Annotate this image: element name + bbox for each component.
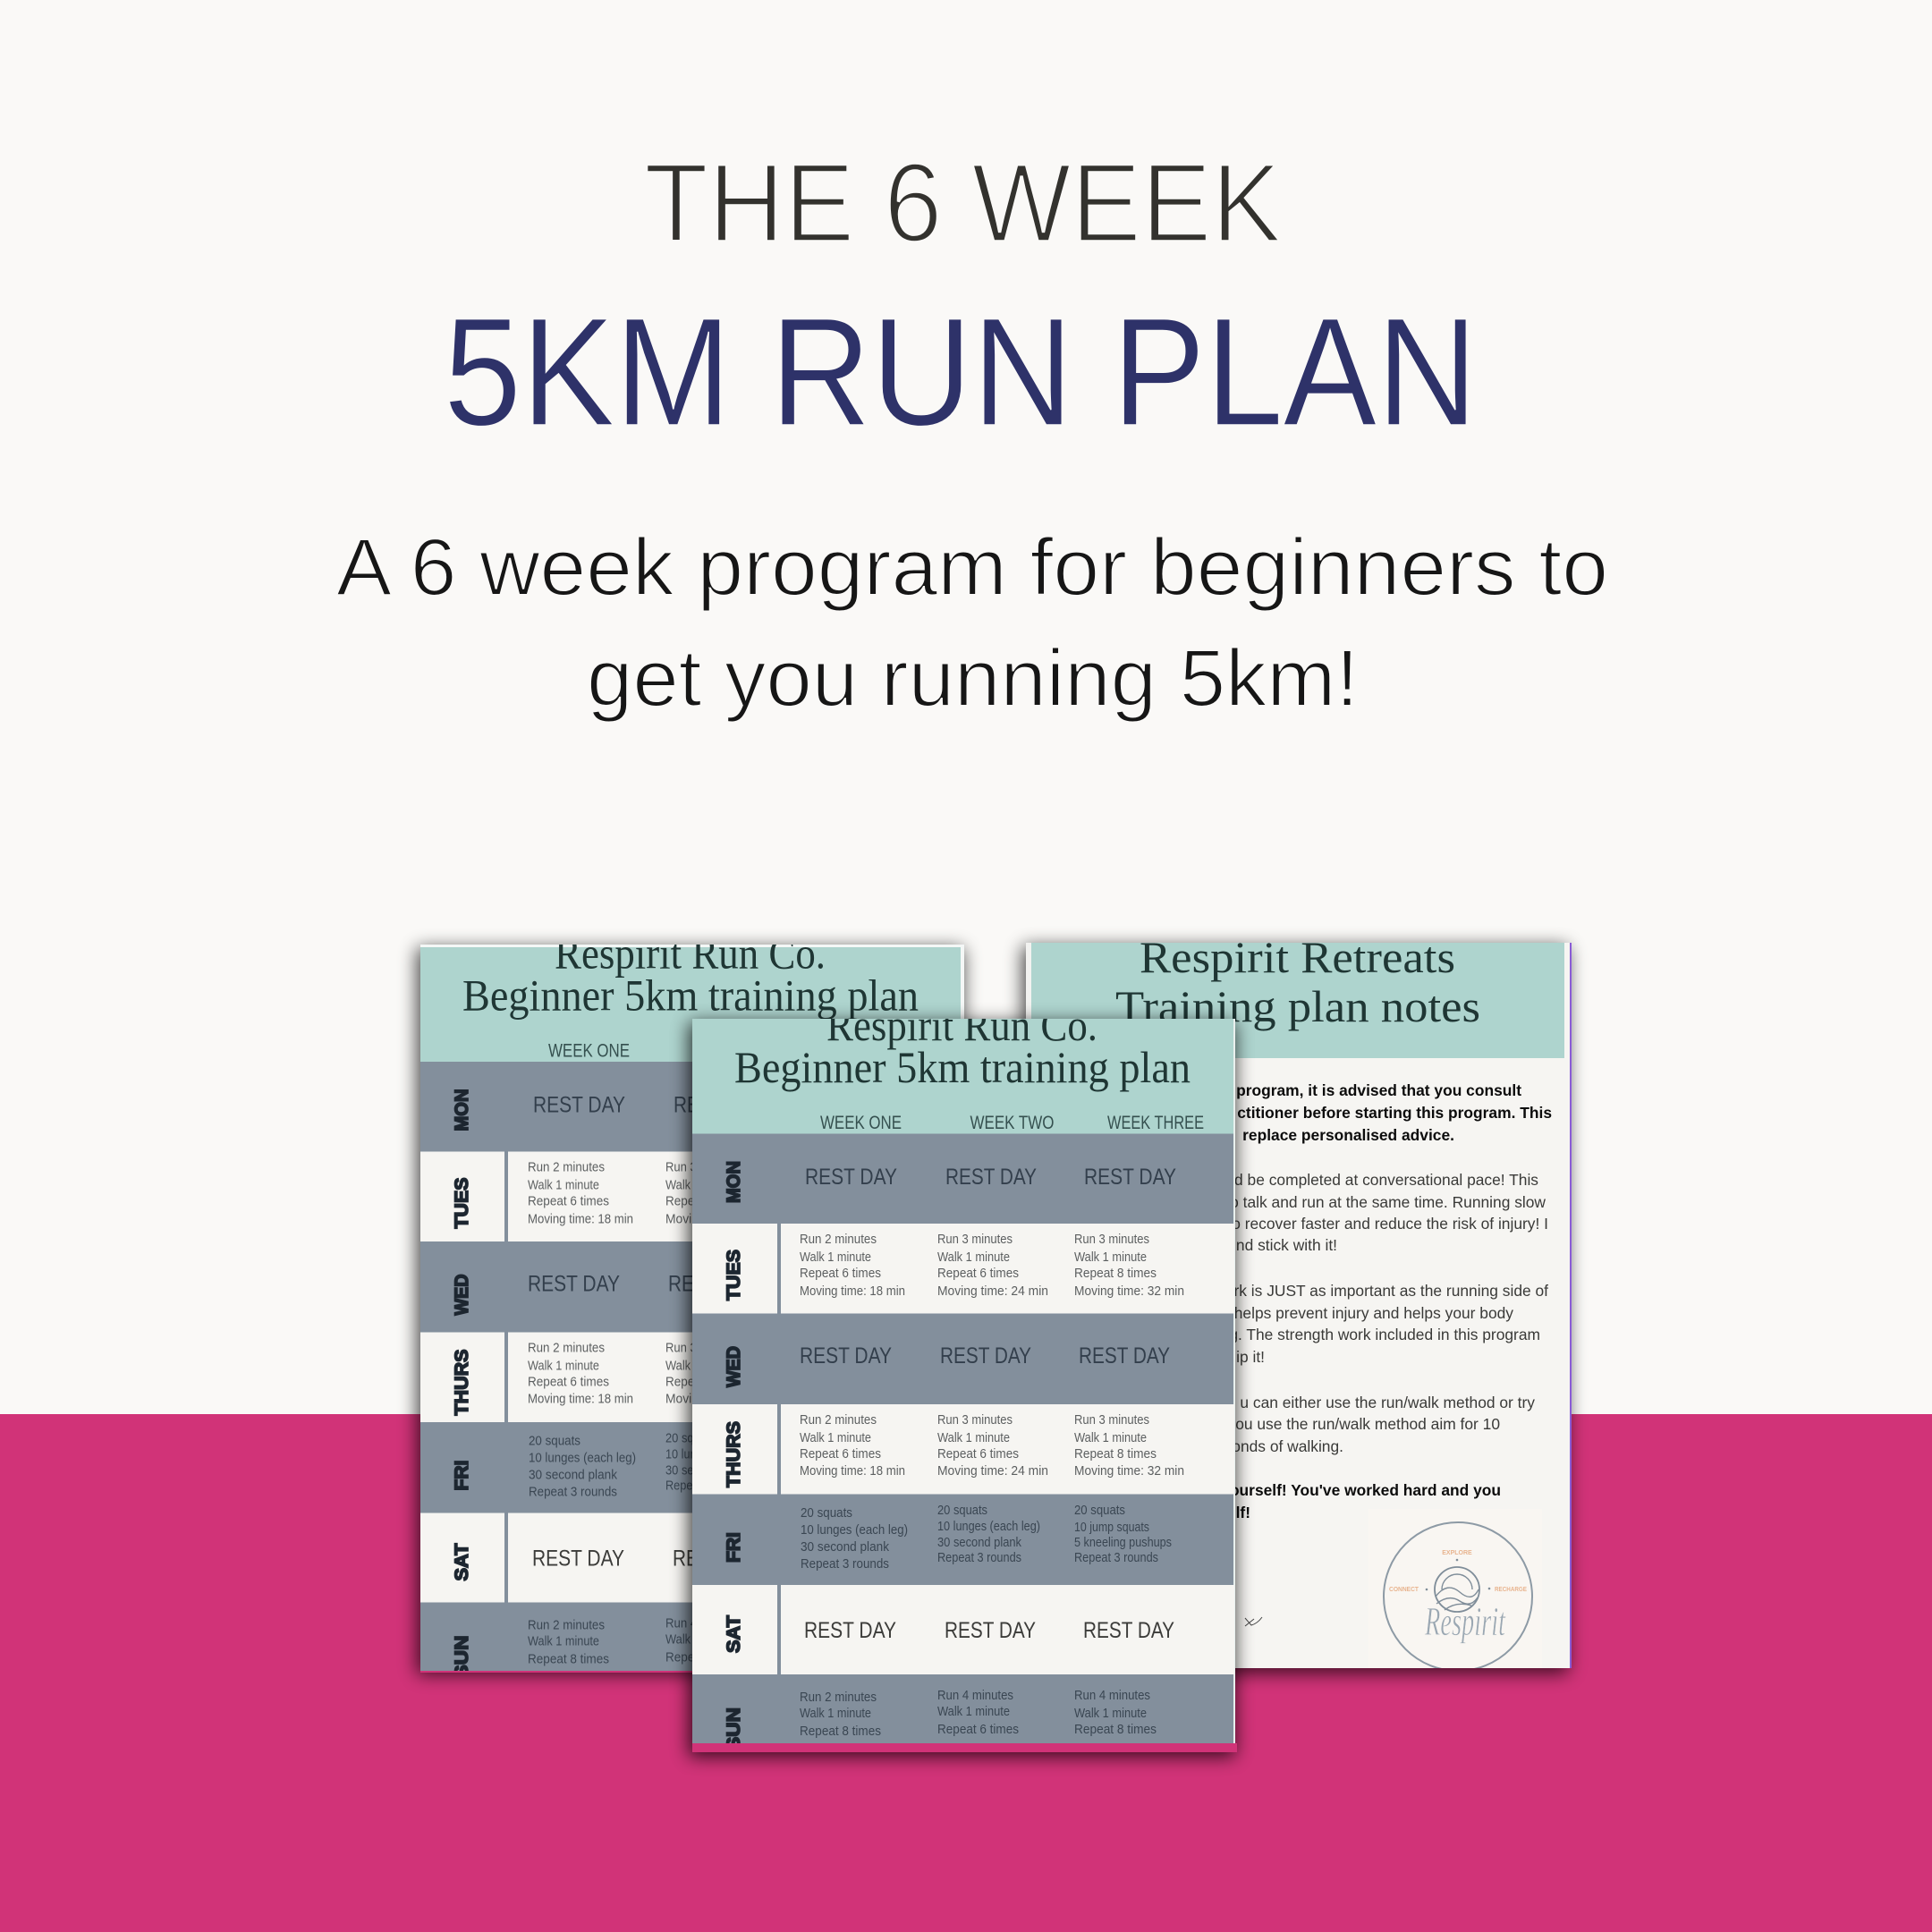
sunday sessions: Walk 1 minute: [1074, 1707, 1147, 1721]
back page schedule table: Run 4 minutes: [665, 1617, 741, 1631]
panel: back training plan page: [417, 928, 964, 1678]
notes body text: helps prevent injury and helps your body: [1234, 1304, 1513, 1322]
panel: front training plan page: [689, 1000, 1237, 1757]
thursday sessions: Run 3 minutes: [1074, 1413, 1149, 1428]
notes body text: [1225, 1081, 1552, 1521]
notes body text: o talk and run at the same time. Running slow: [1230, 1193, 1546, 1211]
back page schedule table: SUN: [452, 1635, 472, 1678]
back page schedule table: REST DAY: [673, 1546, 764, 1571]
back page schedule table: Run 2 minutes: [528, 1619, 605, 1633]
back page schedule table: Walk 1 minute: [665, 1179, 738, 1193]
tuesday sessions: Moving time: 18 min: [800, 1284, 905, 1299]
thursday sessions: Run 3 minutes: [937, 1413, 1013, 1428]
monday rest days: REST DAY: [1084, 1165, 1176, 1190]
friday strength sessions: 20 squats: [937, 1504, 987, 1518]
back page schedule table: Repeat 6 times: [665, 1195, 747, 1209]
day labels: WED: [724, 1346, 744, 1387]
tuesday sessions: Repeat 8 times: [1074, 1267, 1157, 1281]
back page schedule table: WED: [452, 1274, 472, 1315]
back page schedule table: 30 second plank: [665, 1463, 750, 1478]
saturday rest days: [805, 1622, 1174, 1638]
front page week labels: WEEK THREE: [1107, 1113, 1204, 1133]
subtitle: A 6 week program for beginners to: [336, 523, 1608, 613]
back page schedule table: Walk 1 minute: [665, 1633, 738, 1648]
friday strength sessions: [801, 1504, 1172, 1572]
back page schedule table: Moving time: 18 min: [528, 1213, 633, 1227]
notes body text: ou use the run/walk method aim for 10: [1235, 1415, 1500, 1433]
sunday sessions: Run 4 minutes: [937, 1689, 1013, 1703]
tuesday sessions: Run 3 minutes: [1074, 1233, 1149, 1247]
notes body text: ctitioner before starting this program. This: [1237, 1104, 1552, 1122]
front page heading: Respirit Run Co.: [826, 1000, 1097, 1050]
front page heading: [735, 1019, 1190, 1091]
back page schedule table: Repeat 3 rounds: [529, 1485, 617, 1499]
day labels: SAT: [724, 1615, 744, 1653]
back page schedule table: Run 3 minutes: [665, 1342, 741, 1356]
sunday sessions: Run 2 minutes: [800, 1690, 877, 1705]
back page schedule table: REST DAY: [674, 1093, 765, 1118]
back page schedule table: Moving time: 18 min: [528, 1392, 633, 1406]
sunday sessions: Walk 1 minute: [937, 1705, 1010, 1719]
back page schedule table: Walk 1 minute: [528, 1360, 599, 1374]
front page week labels: WEEK ONE: [820, 1113, 902, 1133]
thursday sessions: Walk 1 minute: [800, 1431, 871, 1445]
day labels: FRI: [724, 1532, 744, 1563]
back page schedule table: Walk 1 minute: [528, 1635, 599, 1649]
notes heading: Respirit Retreats: [1140, 932, 1455, 982]
tuesday sessions: Run 2 minutes: [800, 1233, 877, 1247]
sunday sessions: Moving time: 30 min: [937, 1742, 1048, 1757]
notes body text: lf!: [1236, 1504, 1250, 1521]
tuesday sessions: Run 3 minutes: [937, 1233, 1013, 1247]
notes body text: d be completed at conversational pace! This: [1234, 1171, 1538, 1189]
sunday sessions: [800, 1690, 1156, 1738]
back page schedule table: Moving time: 24 min: [665, 1392, 776, 1406]
friday strength sessions: 30 second plank: [801, 1540, 890, 1555]
day labels: MON: [724, 1161, 744, 1203]
friday strength sessions: 10 jump squats: [1074, 1521, 1149, 1535]
wednesday rest days: REST DAY: [800, 1343, 892, 1368]
friday strength sessions: Repeat 3 rounds: [937, 1551, 1021, 1565]
back page schedule table: TUES: [452, 1177, 472, 1229]
tuesday sessions: Walk 1 minute: [800, 1250, 871, 1265]
back page schedule table: 10 lunges (each leg): [529, 1451, 636, 1465]
tuesday sessions: Moving time: 24 min: [937, 1284, 1048, 1299]
friday strength sessions: 30 second plank: [937, 1536, 1022, 1550]
front page week labels: WEEK TWO: [970, 1113, 1054, 1133]
back page schedule table: REST DAY: [528, 1272, 620, 1297]
friday strength sessions: 10 lunges (each leg): [801, 1523, 908, 1538]
back page schedule table: REST DAY: [533, 1093, 625, 1118]
back page schedule table: Repeat 8 times: [528, 1653, 609, 1667]
thursday sessions: Walk 1 minute: [1074, 1431, 1147, 1445]
back page schedule table: Walk 1 minute: [528, 1179, 599, 1193]
back page schedule table: Walk 1 minute: [665, 1360, 738, 1374]
back page schedule table: THURS: [452, 1349, 472, 1415]
notes body text: nd stick with it!: [1236, 1236, 1337, 1254]
title: the 6 week: THE 6 WEEK: [644, 141, 1282, 266]
monday rest days: REST DAY: [805, 1165, 897, 1190]
thursday sessions: [800, 1413, 1184, 1479]
back page schedule table: Run 2 minutes: [528, 1342, 605, 1356]
tuesday sessions: Walk 1 minute: [937, 1250, 1010, 1265]
back page schedule table: 10 lunges (each leg): [665, 1447, 768, 1462]
sign-off mark: [1245, 1617, 1262, 1626]
saturday rest days: REST DAY: [945, 1618, 1036, 1643]
back page schedule table: SAT: [452, 1543, 472, 1581]
icon: respirit logo: EXPLORE: [1442, 1550, 1472, 1556]
icon: respirit logo: RECHARGE: [1495, 1587, 1527, 1593]
sunday sessions: Walk 1 minute: [800, 1707, 871, 1721]
day labels: SUN: [724, 1707, 744, 1750]
title: 5km run plan: 5KM RUN PLAN: [444, 286, 1478, 458]
notes body text: o recover faster and reduce the risk of injury! I: [1232, 1215, 1548, 1233]
tuesday sessions: Repeat 6 times: [800, 1267, 881, 1281]
sunday sessions: Moving time: 40 min: [1074, 1742, 1184, 1757]
friday strength sessions: 10 lunges (each leg): [937, 1520, 1040, 1534]
thursday sessions: Repeat 6 times: [800, 1447, 881, 1462]
back page week label: WEEK ONE: [548, 1041, 630, 1061]
notes heading: Training plan notes: [1115, 981, 1480, 1031]
back page schedule table: Run 3 minutes: [665, 1161, 741, 1175]
notes body text: ourself! You've worked hard and you: [1230, 1481, 1501, 1499]
sunday sessions: Repeat 8 times: [1074, 1723, 1157, 1737]
wednesday rest days: [801, 1347, 1170, 1363]
back page schedule table: REST DAY: [668, 1272, 759, 1297]
front page schedule table: [692, 1134, 1234, 1757]
back page schedule table: Run 2 minutes: [528, 1161, 605, 1175]
back page schedule table: 20 squats: [665, 1431, 716, 1445]
sunday sessions: Repeat 6 times: [937, 1723, 1019, 1737]
wednesday rest days: REST DAY: [1079, 1343, 1170, 1368]
friday strength sessions: 5 kneeling pushups: [1074, 1536, 1172, 1550]
tuesday sessions: Moving time: 32 min: [1074, 1284, 1184, 1299]
subtitle: [336, 523, 1608, 724]
back page schedule table: FRI: [452, 1460, 472, 1490]
day labels: TUES: [724, 1250, 744, 1301]
back page schedule table: Repeat 6 times: [528, 1376, 609, 1390]
notes body text: u can either use the run/walk method or try: [1240, 1394, 1535, 1411]
front page heading: Beginner 5km training plan: [734, 1042, 1191, 1092]
thursday sessions: Walk 1 minute: [937, 1431, 1010, 1445]
back page schedule table: [420, 1062, 692, 1671]
day labels: THURS: [724, 1421, 744, 1487]
back page schedule table: Repeat 6 times: [665, 1651, 747, 1665]
notes body text: g. The strength work included in this program: [1229, 1326, 1540, 1343]
subtitle: get you running 5km!: [587, 634, 1359, 724]
saturday rest days: REST DAY: [1083, 1618, 1174, 1643]
back page schedule table: 30 second plank: [529, 1469, 618, 1483]
notes body text: ork is JUST as important as the running side of: [1225, 1282, 1548, 1300]
panel: training plan notes page: [1022, 932, 1572, 1674]
sunday sessions: Moving time: 24 min: [800, 1742, 905, 1757]
notes heading: [1116, 943, 1479, 1030]
day labels: [726, 1161, 741, 1743]
notes body text: replace personalised advice.: [1242, 1126, 1454, 1144]
thursday sessions: Moving time: 24 min: [937, 1464, 1048, 1479]
thursday sessions: Repeat 8 times: [1074, 1447, 1157, 1462]
thursday sessions: Repeat 6 times: [937, 1447, 1019, 1462]
sunday sessions: Run 4 minutes: [1074, 1689, 1150, 1703]
friday strength sessions: Repeat 3 rounds: [801, 1557, 889, 1572]
monday rest days: REST DAY: [945, 1165, 1037, 1190]
friday strength sessions: Repeat 3 rounds: [1074, 1551, 1158, 1565]
tuesday sessions: [800, 1233, 1184, 1299]
notes body text: ip it!: [1236, 1348, 1265, 1366]
thursday sessions: Moving time: 32 min: [1074, 1464, 1184, 1479]
friday strength sessions: 20 squats: [801, 1506, 852, 1521]
friday strength sessions: 20 squats: [1074, 1504, 1125, 1518]
back page schedule table: REST DAY: [532, 1546, 624, 1571]
back page schedule table: Moving time: 24 min: [665, 1213, 776, 1227]
wednesday rest days: REST DAY: [940, 1343, 1031, 1368]
back page heading: Beginner 5km training plan: [462, 970, 919, 1020]
back page schedule table: Repeat 6 times: [528, 1195, 609, 1209]
notes body text: program, it is advised that you consult: [1236, 1081, 1521, 1099]
icon: respirit logo: CONNECT: [1389, 1587, 1419, 1593]
icon: respirit logo: [1383, 1521, 1533, 1668]
saturday rest days: REST DAY: [804, 1618, 896, 1643]
back page heading: Respirit Run Co.: [555, 928, 826, 979]
icon: respirit logo: Respirit: [1424, 1598, 1506, 1644]
tuesday sessions: Walk 1 minute: [1074, 1250, 1147, 1265]
sunday sessions: Repeat 8 times: [800, 1724, 881, 1739]
tuesday sessions: Repeat 6 times: [937, 1267, 1019, 1281]
front page week labels: [820, 1116, 1204, 1129]
back page heading: [463, 945, 918, 1020]
monday rest days: [807, 1168, 1175, 1184]
back page schedule table: 20 squats: [529, 1435, 580, 1449]
back page schedule table: Repeat 3 rounds: [665, 1479, 750, 1494]
thursday sessions: Moving time: 18 min: [800, 1464, 905, 1479]
thursday sessions: Run 2 minutes: [800, 1413, 877, 1428]
back page schedule table: Repeat 6 times: [665, 1376, 747, 1390]
notes body text: onds of walking.: [1232, 1437, 1343, 1455]
back page schedule table: MON: [452, 1089, 472, 1131]
